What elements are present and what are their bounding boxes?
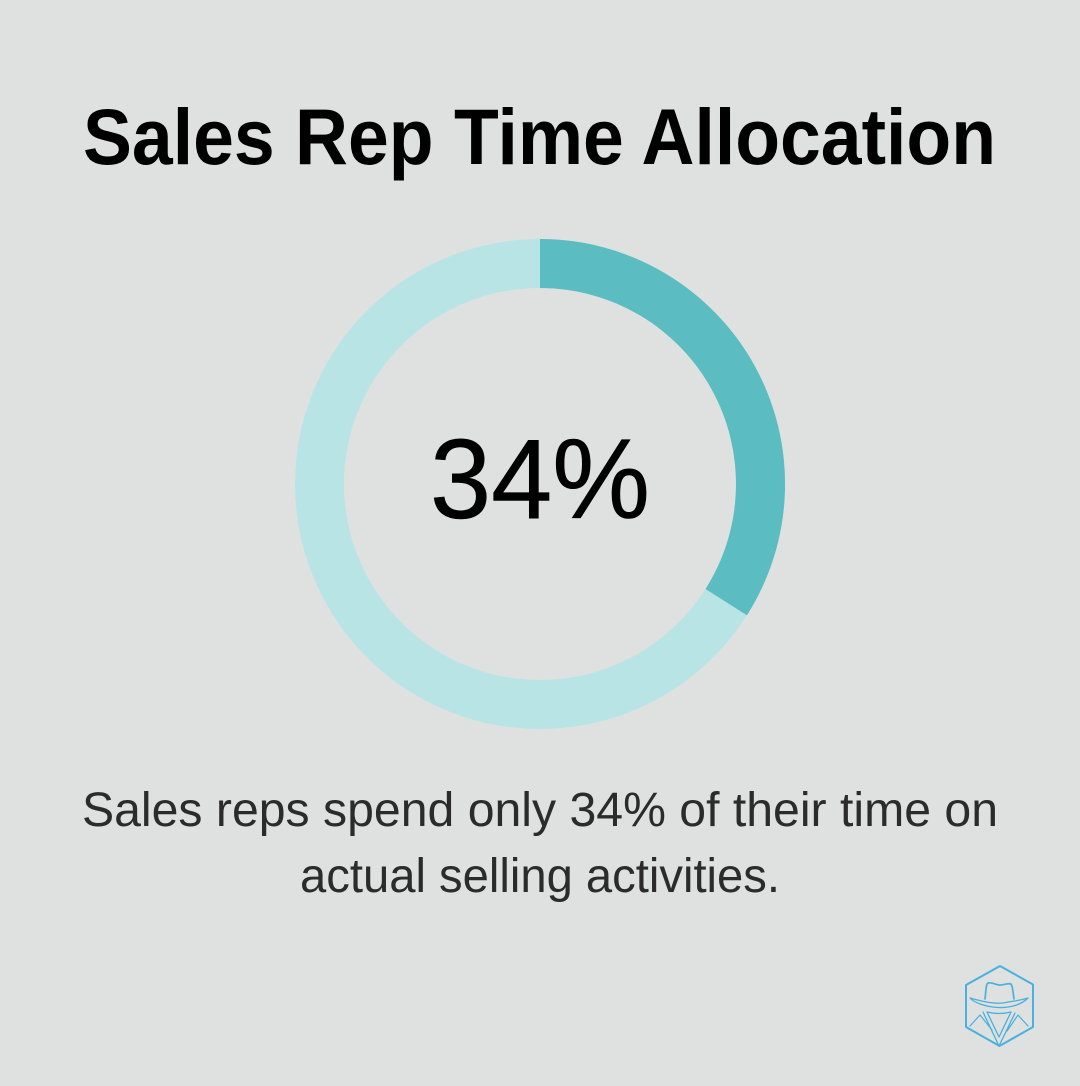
donut segment: 34% selling time: [540, 239, 785, 615]
description text: actual selling activities.: [300, 850, 780, 903]
title: Sales Rep Time Allocation: [83, 92, 996, 181]
icon: logo hexagon with hat and coat figure: [966, 966, 1033, 1046]
description text: Sales reps spend only 34% of their time on: [82, 784, 998, 837]
description text: [82, 784, 998, 903]
center value: 34%: [430, 416, 650, 542]
donut track: remaining 66%: [320, 264, 760, 704]
donut chart: [320, 239, 785, 704]
